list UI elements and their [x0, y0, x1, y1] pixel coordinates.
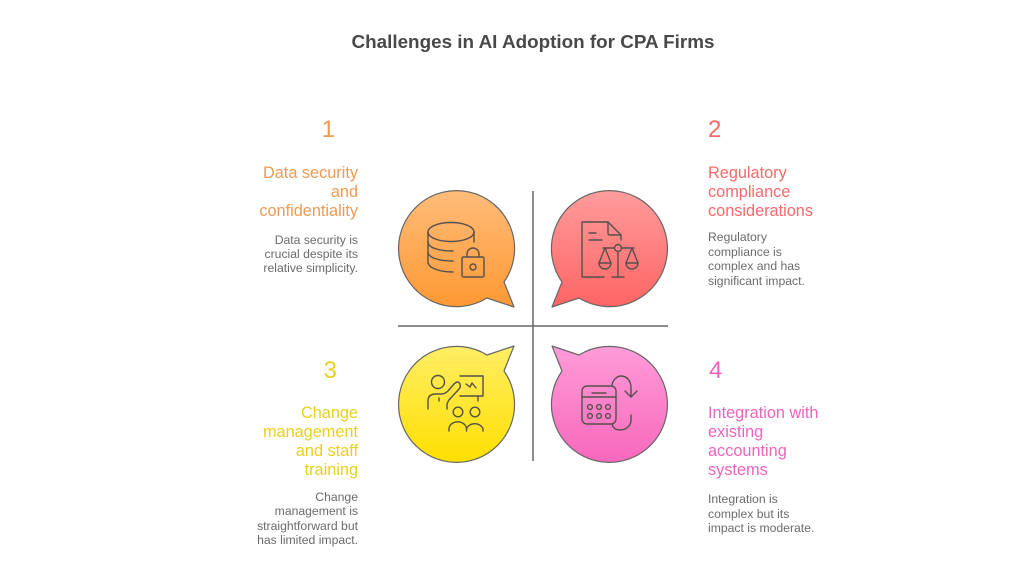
description 4: impact is moderate. [708, 521, 814, 535]
icon: database with lock [428, 222, 484, 277]
speech bubble: red [551, 191, 667, 307]
description 3: has limited impact. [257, 533, 358, 547]
speech bubble: orange [399, 191, 515, 307]
heading 3: Change [301, 404, 358, 422]
icon: document with scales [582, 222, 638, 277]
heading 1 [259, 164, 359, 220]
quadrant divider: vertical line [532, 191, 534, 461]
panel: challenge 3 text [257, 357, 359, 547]
heading 3: training [305, 461, 358, 479]
heading 4 [708, 404, 818, 479]
heading 1: Data security [263, 164, 359, 182]
heading 2: Regulatory [708, 164, 788, 182]
heading 4: accounting [708, 442, 787, 460]
speech bubble: yellow [399, 346, 515, 462]
number 2: 2 [708, 116, 721, 143]
description 3: Change [315, 490, 358, 504]
heading 3: management [263, 423, 358, 441]
description 3: straightforward but [257, 519, 359, 533]
description 1: Data security is [275, 233, 358, 247]
description 4: complex but its [708, 507, 789, 521]
description 2: compliance is [708, 245, 782, 259]
heading 2: considerations [708, 202, 813, 220]
number 1: 1 [322, 116, 335, 143]
heading 3: and staff [296, 442, 358, 460]
panel: challenge 1 text [259, 116, 359, 275]
heading 1: confidentiality [259, 202, 359, 220]
description 3 [257, 490, 359, 547]
description 2: complex and has [708, 259, 800, 273]
icon: presenter with audience [428, 376, 483, 431]
heading 3 [263, 404, 358, 479]
description 2 [708, 230, 805, 288]
icon: calculator with cycle arrows [582, 376, 637, 430]
heading 2: compliance [708, 183, 790, 201]
description 1 [263, 233, 358, 275]
description 2: Regulatory [708, 230, 768, 244]
number 3: 3 [324, 357, 337, 384]
heading 1: and [331, 183, 358, 201]
heading 4: existing [708, 423, 763, 441]
description 3: management is [275, 504, 358, 518]
description 2: significant impact. [708, 274, 805, 288]
heading 4: systems [708, 461, 768, 479]
description 1: crucial despite its [265, 247, 358, 261]
heading 2 [708, 164, 813, 220]
description 4: Integration is [708, 492, 778, 506]
description 4 [708, 492, 814, 535]
heading 4: Integration with [708, 404, 818, 422]
quadrant divider: horizontal line [398, 325, 668, 327]
description 1: relative simplicity. [263, 261, 358, 275]
panel: challenge 4 text [708, 357, 818, 535]
panel: challenge 2 text [708, 116, 813, 288]
number 4: 4 [709, 357, 722, 384]
speech bubble: pink [551, 346, 667, 462]
title: Challenges in AI Adoption for CPA Firms [352, 32, 714, 52]
